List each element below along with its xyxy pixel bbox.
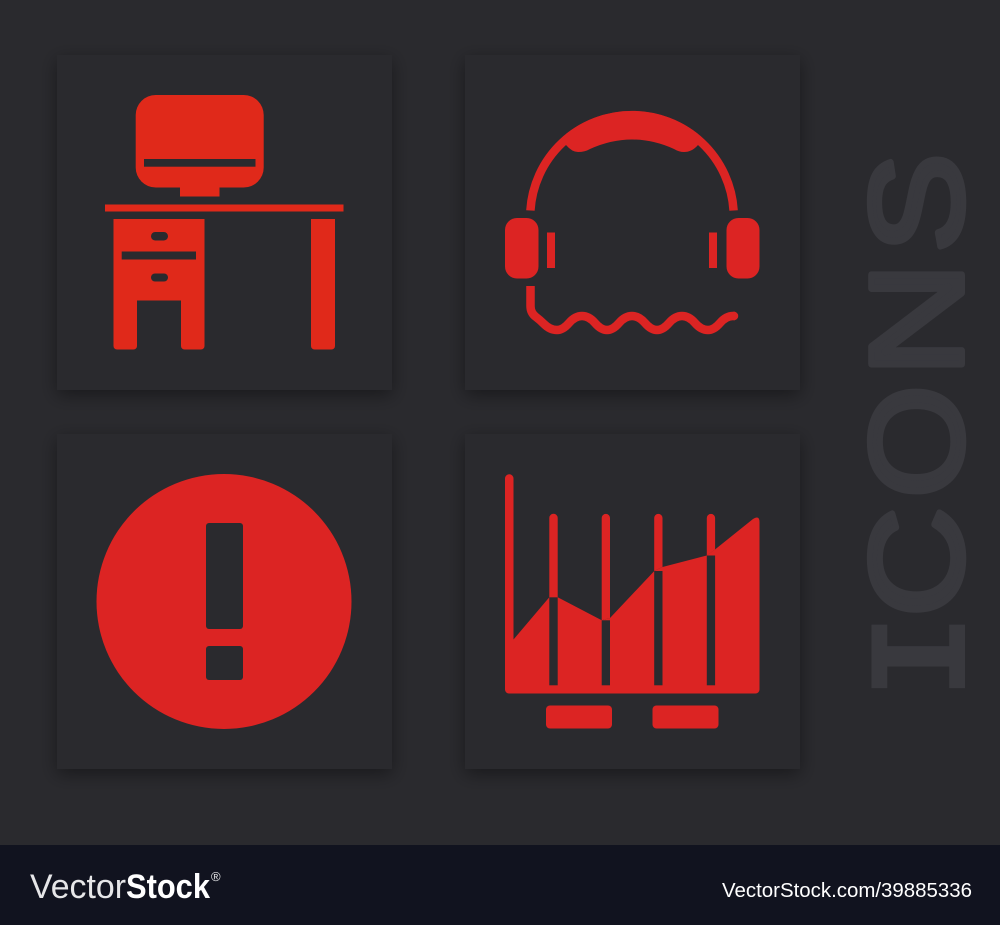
- footer image id: VectorStock.com/39885336: [722, 880, 972, 902]
- footer registered mark: ®: [211, 869, 221, 884]
- vertical watermark word ICONS: C: [843, 507, 990, 617]
- panel: chart: [465, 434, 800, 769]
- panel: desk: [57, 55, 392, 390]
- icon: headset: [505, 111, 760, 330]
- icon: computer desk: [105, 95, 344, 350]
- vertical watermark word ICONS: [843, 153, 1000, 699]
- panel: alert: [57, 434, 392, 769]
- vertical watermark word ICONS: S: [843, 153, 990, 253]
- footer bar: [0, 845, 1000, 925]
- icon: exclamation circle: [96, 474, 352, 729]
- panel: headphones: [465, 55, 800, 390]
- footer logo: VectorStock: [30, 868, 210, 906]
- vertical watermark word ICONS: O: [843, 385, 990, 498]
- vertical watermark word ICONS: N: [843, 262, 990, 377]
- icon: area chart: [505, 474, 760, 728]
